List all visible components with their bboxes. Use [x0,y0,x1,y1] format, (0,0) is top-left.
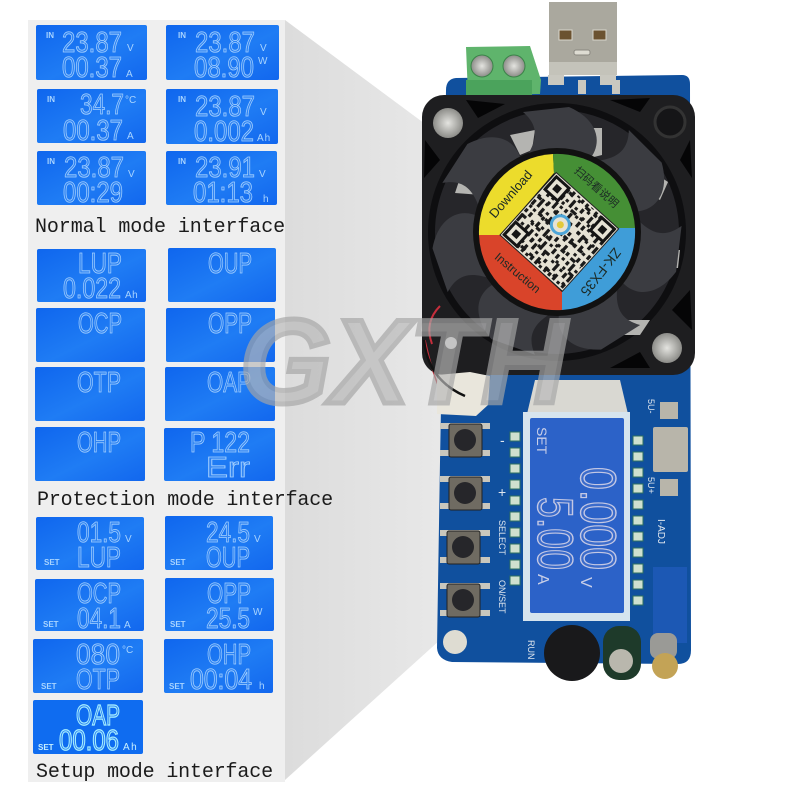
panel: LCD interface list [28,20,333,784]
LCD: voltage and hours: 23.91 [195,152,255,184]
LCD module [523,380,630,621]
LCD: OCP setting: SET [43,620,59,629]
LCD: voltage and capacity: V [260,107,267,118]
LCD: OUP setting: SET [170,558,186,567]
caption: setup mode: Setup mode interface [36,761,273,784]
background wedge shadow [285,20,440,780]
LCD: voltage and power: W [258,56,268,67]
LCD: OHP setting [164,639,273,696]
USB plug [548,2,620,94]
LCD: OUP setting [165,516,273,574]
LCD: voltage and elapsed time: 23.87 [64,152,124,184]
silkscreen labels: - [500,432,505,448]
silkscreen labels: SELECT [497,520,507,556]
LCD: temperature and current: 00.37 [63,115,123,147]
screw terminal [466,46,541,95]
LCD: voltage and power: V [260,43,267,54]
LCD: OTP [35,367,145,421]
LCD: OAP: OAP [207,367,251,399]
LCD: voltage and capacity: IN [178,95,186,104]
section: normal mode [35,25,285,239]
LCD: voltage and capacity: Ah [257,133,271,144]
silkscreen labels: 5U+ [646,477,656,494]
LCD: OPP: OPP [208,308,252,340]
LCD: OUP [168,248,276,302]
LCD: OAP setting: Ah [123,742,138,753]
QR code [500,173,619,291]
LCD: LUP: Ah [125,290,138,301]
LCD: voltage and power: 08.90 [194,52,254,84]
LCD: voltage and power: 23.87 [195,27,255,59]
silkscreen labels: + [498,484,506,500]
LCD: OHP setting: OHP [207,639,251,671]
LCD: LUP setting: SET [44,558,60,567]
LCD: OTP setting: OTP [76,664,120,696]
LCD: LUP setting [36,517,144,574]
fan blades [426,107,686,362]
corner vents [424,98,692,368]
LCD: voltage and current: 00.37 [62,52,122,84]
LCD: voltage and hours: 01:13 [193,177,253,209]
hub sticker: Instruction [492,250,543,296]
LCD module: SET [534,427,550,455]
LCD: OUP setting: V [254,534,261,545]
LCD: OCP: OCP [78,308,122,340]
LCD: error code: Err [206,452,250,484]
LCD: voltage and elapsed time [37,151,146,209]
LCD: OUP: OUP [208,248,252,280]
LCD: voltage and current: V [127,43,134,54]
LCD: LUP: LUP [78,248,122,280]
finder patterns [504,177,614,287]
LCD: temperature and current: A [127,131,134,142]
silkscreen labels [497,399,666,660]
LCD: OAP setting: SET [38,743,54,752]
circuit board [437,75,691,664]
hub sticker: ZK-FX35 [577,245,624,299]
LCD module: 5.00 [527,497,583,570]
LCD module: 0.000 [570,467,626,570]
buzzer [544,625,600,681]
LCD: voltage and elapsed time: IN [47,157,55,166]
LCD: voltage and power [166,25,279,84]
LCD: voltage and current: A [126,69,133,80]
LCD: OPP [166,308,275,362]
LCD: voltage and elapsed time: 00:29 [63,177,123,209]
LCD: voltage and elapsed time: V [128,169,135,180]
capacitor [603,626,641,680]
screws [433,108,463,138]
LCD: OHP: OHP [77,427,121,459]
LCD: OAP setting: OAP [76,700,120,732]
LCD module: V [577,577,594,588]
section: setup mode [33,516,274,784]
LCD: OPP setting: OPP [207,578,251,610]
LCD: voltage and power: IN [178,31,186,40]
LCD: OAP setting: 00.06 [59,725,119,757]
LCD: voltage and hours: IN [178,157,186,166]
heatsink fragments [445,128,680,345]
LCD: OHP [35,427,145,481]
LCD: OUP setting: OUP [206,542,250,574]
watermark: GXTH [240,295,568,429]
LCD: OPP setting: W [253,607,263,618]
tactile buttons [440,423,490,617]
LCD: temperature and current: °C [125,95,136,106]
LCD: OHP setting: 00:04 [190,664,252,696]
hub sticker: Download [486,167,535,221]
LCD: temperature and current [37,89,146,147]
LCD: OCP [36,308,145,362]
LCD: LUP setting: 01.5 [77,517,121,549]
LCD: OHP setting: SET [169,682,185,691]
LCD: voltage and current [36,25,147,84]
LCD module: A [534,574,551,585]
micro USB and solder pads [653,402,688,496]
cooling fan [422,95,695,375]
LCD: OTP setting [33,639,143,696]
LCD: OTP setting: SET [41,682,57,691]
LCD: error code [164,427,275,484]
LCD: LUP: 0.022 [63,273,121,305]
LCD: voltage and capacity [166,89,278,148]
solder blob [443,630,467,654]
LCD: OPP setting: SET [170,620,186,629]
LCD: voltage and hours: h [263,194,269,205]
hub sticker [473,148,641,316]
LCD: OCP setting: A [124,620,131,631]
LCD: error code: P 122 [190,427,250,459]
LCD: OPP setting: 25.5 [206,603,250,635]
LCD: OAP [165,367,275,421]
hub sticker: 扫码看说明 [572,163,622,211]
LCD: OCP setting: OCP [77,578,121,610]
fan wires and connector [424,306,490,416]
silkscreen labels: ON/SET [497,580,507,614]
caption: normal mode: Normal mode interface [35,216,285,239]
trim potentiometer [650,567,687,679]
caption: protection mode: Protection mode interface [37,489,333,512]
LCD: voltage and capacity: 0.002 [194,116,254,148]
silkscreen labels: RUN [526,640,536,660]
LCD: OCP setting [35,578,144,635]
product: load tester board [422,2,695,681]
LCD: voltage and hours [166,151,277,209]
LCD: voltage and hours: V [259,169,266,180]
LCD: voltage and current: 23.87 [62,27,122,59]
LCD: LUP setting: LUP [77,542,121,574]
LCD: OCP setting: 04.1 [77,603,121,635]
LCD: OTP setting: 080 [76,639,120,671]
silkscreen labels: I-ADJ [655,519,666,544]
section: protection mode [35,248,333,512]
silkscreen labels: 5U- [646,399,656,414]
LCD: OPP setting [165,578,274,635]
LCD: OTP: OTP [77,367,121,399]
LCD: LUP [37,248,146,305]
LCD: voltage and current: IN [46,31,54,40]
LCD: voltage and capacity: 23.87 [195,91,255,123]
LCD: temperature and current: 34.7 [80,89,124,121]
LCD: temperature and current: IN [47,95,55,104]
LCD: OAP setting [33,700,143,757]
LCD: LUP setting: V [125,534,132,545]
LCD: OHP setting: h [259,681,265,692]
LCD: OUP setting: 24.5 [206,517,250,549]
LCD: OTP setting: °C [122,645,133,656]
header pins [510,432,643,605]
